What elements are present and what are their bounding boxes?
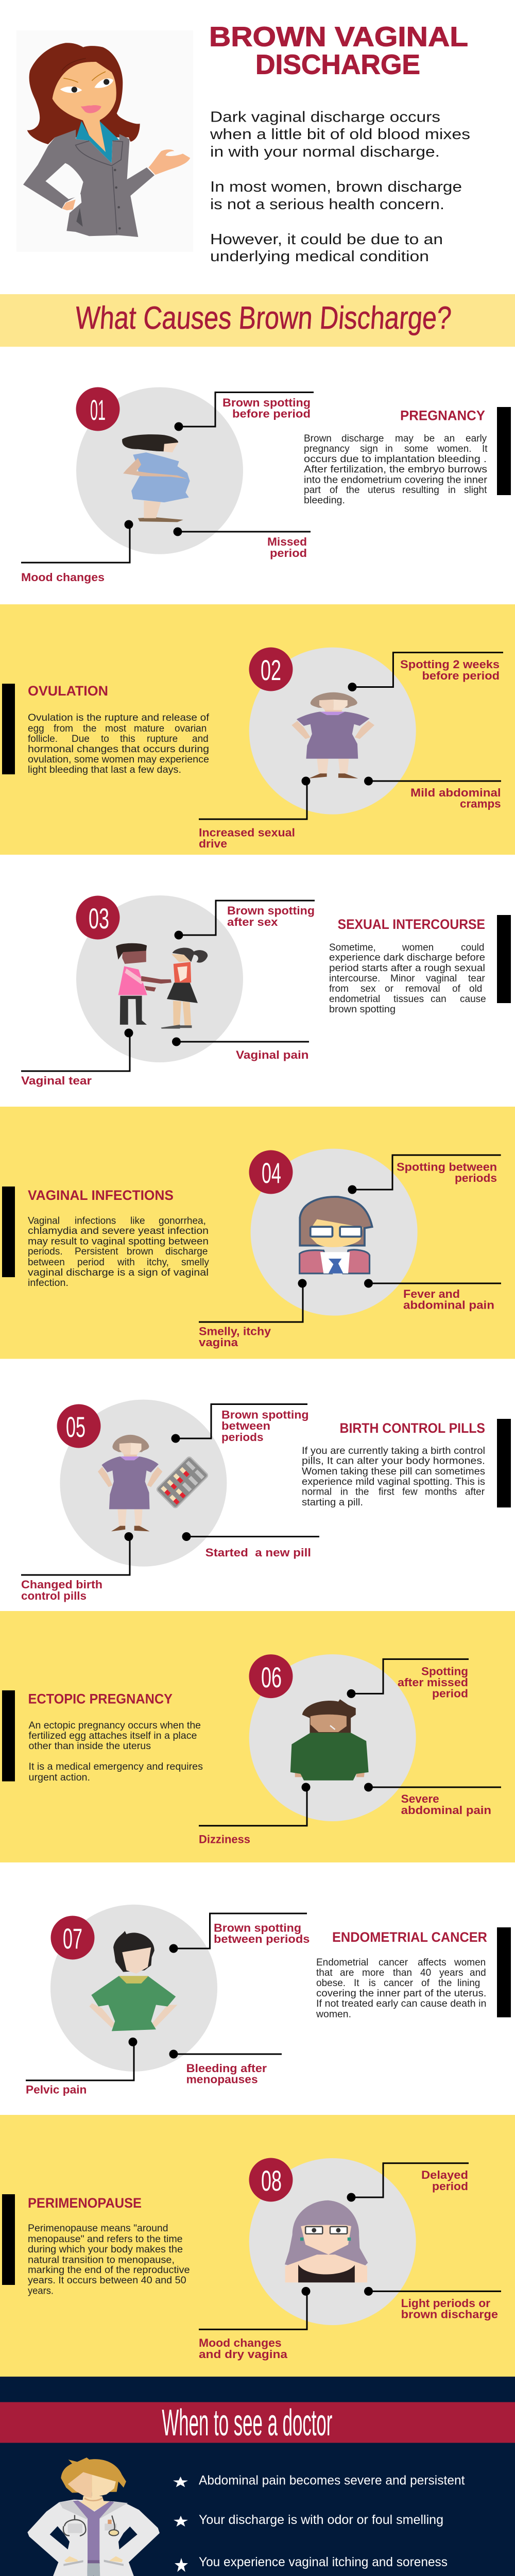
- callout: spotting 2 weeks before period: [348, 652, 503, 691]
- callout: brown spotting between periods: periods: [221, 1431, 264, 1444]
- body text: sexual intercourse: vaginal: [426, 973, 457, 984]
- body text: pregnancy: early: [466, 433, 487, 444]
- callout: fever and abdominal pain: Fever and: [403, 1287, 460, 1300]
- body text: ovulation: hormonal changes that occurs during: [28, 744, 209, 755]
- callout: bleeding after menopauses: Bleeding after: [186, 2062, 267, 2075]
- body text: pregnancy: women.: [437, 444, 472, 454]
- number badge 06: 06: [261, 1661, 282, 1693]
- body text: ovulation: ovarian: [175, 723, 207, 734]
- accent bar: [497, 915, 511, 1003]
- illustration circle with couple: [76, 895, 243, 1062]
- number badge 02: [249, 647, 293, 691]
- accent bar: [497, 1927, 511, 2018]
- body text: pregnancy: slight: [464, 485, 487, 496]
- heading: when to see a doctor: When to see a doctor: [162, 2402, 332, 2444]
- number badge 08: [249, 2158, 293, 2202]
- accent bar: [2, 1690, 15, 1782]
- body text: vaginal infections: smelly: [181, 1257, 209, 1268]
- callout: fever and abdominal pain: abdominal pain: [403, 1299, 494, 1312]
- callout: spotting after missed period: [347, 1659, 469, 1700]
- panel: 07 endometrial cancer: [26, 1905, 511, 2096]
- callout: fever and abdominal pain: [364, 1279, 501, 1312]
- body text: vaginal infections: brown: [127, 1246, 153, 1257]
- callout: pelvic pain: [26, 2038, 137, 2096]
- body text: pregnancy: Brown: [304, 433, 332, 444]
- callout: bleeding after menopauses: menopauses: [186, 2073, 258, 2086]
- body text: perimenopause: natural transition to menopause,: [28, 2255, 175, 2266]
- callout: increased sexual drive: Increased sexual: [199, 826, 295, 839]
- body text: sexual intercourse: old: [469, 984, 482, 994]
- accent bar: [2, 1187, 15, 1277]
- callout: pelvic pain: Pelvic pain: [26, 2083, 87, 2096]
- intro text: underlying medical condition: [210, 248, 429, 265]
- number badge 01: 01: [90, 394, 106, 426]
- body text: ectopic pregnancy: An ectopic pregnancy occurs when the: [29, 1720, 201, 1731]
- body text: sexual intercourse: of: [452, 984, 461, 994]
- body text: ovulation: mature: [134, 723, 164, 734]
- callout: missed period: [173, 528, 311, 560]
- body text: pregnancy: in: [385, 444, 393, 454]
- callout: brown spotting before period: before period: [232, 408, 311, 420]
- body text: endometrial cancer: more: [362, 1968, 384, 1978]
- body text: vaginal infections: infection.: [28, 1278, 68, 1289]
- callout: spotting after missed period: period: [432, 1687, 468, 1700]
- panel: 05 birth control pills: [21, 1400, 511, 1602]
- panel: 08 perimenopause: [0, 2115, 515, 2377]
- body text: birth control pills: normal: [302, 1487, 332, 1497]
- body text: vaginal infections: [28, 1215, 209, 1289]
- intro text: is not a serious health concern.: [210, 196, 444, 213]
- body text: sexual intercourse: from: [329, 984, 349, 994]
- accent bar: [2, 2194, 15, 2285]
- body text: pregnancy: occurs due to implantation bleeding .: [304, 454, 487, 465]
- body text: perimenopause: years.: [28, 2286, 54, 2297]
- illustration circle with purple haired woman: [249, 2158, 416, 2325]
- body text: ovulation: Ovulation is the rupture and release of: [28, 713, 210, 723]
- list item: abdominal pain: Abdominal pain becomes severe and persistent: [199, 2473, 465, 2487]
- body text: pregnancy: discharge: [341, 433, 384, 444]
- callout: severe abdominal pain: [364, 1783, 501, 1817]
- body text: vaginal infections: between: [28, 1257, 65, 1268]
- callout: severe abdominal pain: Severe: [401, 1792, 439, 1805]
- body text: endometrial cancer: It: [354, 1978, 359, 1989]
- illustration circle with pregnant woman: [76, 387, 243, 554]
- callout: mood changes: [21, 520, 133, 584]
- body text: birth control pills: starting a pill.: [302, 1497, 363, 1508]
- callout: brown spotting before period: [174, 393, 314, 431]
- callout: smelly itchy vagina: vagina: [199, 1336, 238, 1349]
- number badge 03: [76, 895, 119, 940]
- intro text: Dark vaginal discharge occurs: [210, 109, 440, 126]
- callout: brown spotting after sex: Brown spotting: [227, 904, 315, 917]
- body text: ovulation: to: [101, 734, 109, 744]
- accent bar: [497, 1419, 511, 1507]
- intro text: when a little bit of old blood mixes: [210, 126, 470, 143]
- number badge 05: [57, 1404, 101, 1448]
- body text: endometrial cancer: women: [454, 1957, 486, 1968]
- body text: pregnancy: be: [424, 433, 435, 444]
- number badge 04: [249, 1150, 293, 1194]
- panel: 06 ectopic pregnancy: [0, 1611, 515, 1862]
- callout: increased sexual drive: [199, 777, 310, 850]
- body text: ovulation: most: [105, 723, 127, 734]
- callout: bleeding after menopauses: [169, 2049, 282, 2086]
- body text: vaginal infections: like: [130, 1215, 145, 1226]
- body text: endometrial cancer: years: [439, 1968, 463, 1978]
- panel: 02 ovulation: [0, 604, 515, 855]
- callout: brown spotting between periods: Brown spotting: [214, 1922, 301, 1935]
- body text: sexual intercourse: experience dark discharge before: [329, 952, 485, 963]
- body text: vaginal infections: may result to vaginal spotting between: [28, 1236, 209, 1247]
- body text: pregnancy: the: [346, 485, 359, 496]
- callout: started a new pill: [182, 1532, 319, 1559]
- callout: dizziness: [199, 1783, 310, 1846]
- callout: mood changes and dry vagina: Mood changes: [199, 2336, 282, 2349]
- body text: ovulation: Due: [72, 734, 90, 744]
- callout: brown spotting between periods: [169, 1913, 310, 1953]
- body text: sexual intercourse: intercourse.: [329, 973, 380, 984]
- illustration: woman presenting: [16, 30, 193, 252]
- body text: endometrial cancer: are: [340, 1968, 354, 1978]
- body text: birth control pills: in: [340, 1487, 348, 1497]
- callout: smelly itchy vagina: Smelly, itchy: [199, 1325, 271, 1338]
- body text: ectopic pregnancy: It is a medical emergency and requires: [29, 1761, 203, 1772]
- callout: mood changes and dry vagina: and dry vagina: [199, 2348, 288, 2361]
- body text: vaginal infections: chlamydia and severe yeast infection: [28, 1226, 209, 1236]
- body text: sexual intercourse: tear: [468, 973, 485, 984]
- body text: endometrial cancer: than: [393, 1968, 412, 1978]
- body text: endometrial cancer: the: [438, 1978, 452, 1989]
- body text: vaginal infections: discharge: [165, 1246, 208, 1257]
- heading: endometrial cancer: ENDOMETRIAL CANCER: [332, 1929, 487, 1945]
- body text: endometrial cancer: and: [470, 1968, 486, 1978]
- body text: birth control pills: Women taking these pill can sometimes: [302, 1466, 485, 1477]
- body text: sexual intercourse: [329, 942, 486, 1015]
- body text: perimenopause: [28, 2223, 190, 2297]
- heading banner: what causes brown discharge: [0, 294, 515, 347]
- body text: ovulation: the: [83, 723, 96, 734]
- callout: mild abdominal cramps: Mild abdominal: [410, 786, 501, 799]
- callout: started a new pill: Started a new pill: [205, 1546, 311, 1559]
- heading: vaginal infections: VAGINAL INFECTIONS: [28, 1188, 174, 1203]
- callout: brown spotting after sex: after sex: [227, 916, 278, 928]
- heading: pregnancy: PREGNANCY: [400, 408, 485, 423]
- panel: 04 vaginal infections: [0, 1107, 515, 1359]
- body text: endometrial cancer: women.: [316, 2009, 351, 2020]
- body text: endometrial cancer: [316, 1957, 486, 2020]
- body text: ectopic pregnancy: other than inside the uterus: [29, 1741, 151, 1752]
- number badge 08: 08: [261, 2164, 282, 2197]
- body text: vaginal infections: itchy,: [147, 1257, 169, 1268]
- callout: spotting 2 weeks before period: before period: [422, 669, 500, 682]
- callout: spotting after missed period: Spotting: [421, 1665, 468, 1678]
- body text: sexual intercourse: tissues: [393, 994, 424, 1005]
- title: DISCHARGE: [255, 49, 420, 80]
- body text: ovulation: this: [120, 734, 135, 744]
- heading: when to see a doctor: [0, 2402, 515, 2444]
- body text: perimenopause: marking the end of the reproductive: [28, 2265, 190, 2276]
- panel: hero introduction: [16, 22, 470, 265]
- callout: brown spotting after sex: [174, 901, 315, 940]
- body text: pregnancy: sign: [360, 444, 378, 454]
- heading: sexual intercourse: SEXUAL INTERCOURSE: [338, 917, 485, 932]
- panel: when to see a doctor: [0, 2377, 515, 2576]
- body text: vaginal infections: period: [77, 1257, 105, 1268]
- illustration circle with woman and pill blister: [60, 1400, 227, 1567]
- intro text: However, it could be due to an: [210, 231, 443, 248]
- body text: pregnancy: part: [304, 485, 321, 496]
- body text: ovulation: follicle.: [28, 734, 58, 744]
- body text: birth control pills: first: [379, 1487, 394, 1497]
- body text: ectopic pregnancy: urgent action.: [29, 1772, 90, 1783]
- callout: light periods or brown discharge: [364, 2287, 501, 2321]
- body text: pregnancy: [304, 433, 488, 506]
- body text: ovulation: rupture: [147, 734, 178, 744]
- callout: delayed period: Delayed: [421, 2168, 468, 2181]
- title: [209, 22, 468, 80]
- number badge 07: 07: [63, 1922, 82, 1955]
- body text: birth control pills: months: [425, 1487, 457, 1497]
- body text: vaginal infections: Vaginal: [28, 1215, 60, 1226]
- callout: vaginal pain: [172, 1038, 309, 1061]
- body text: perimenopause: years. It occurs between 40 and 50: [28, 2275, 186, 2286]
- body text: sexual intercourse: cause: [460, 994, 486, 1005]
- body text: sexual intercourse: period starts after a rough sexual: [329, 963, 485, 974]
- body text: endometrial cancer: cancer: [384, 1978, 414, 1989]
- body text: ovulation: ovulation, some women may experience: [28, 754, 209, 765]
- body text: pregnancy: into the endometrium covering the inner: [304, 475, 488, 485]
- body text: vaginal infections: periods.: [28, 1246, 63, 1257]
- callout: changed birth control pills: [21, 1532, 133, 1602]
- heading: birth control pills: BIRTH CONTROL PILLS: [340, 1420, 485, 1436]
- callout: spotting between periods: [348, 1155, 501, 1194]
- number badge 05: 05: [66, 1411, 85, 1443]
- callout: vaginal tear: Vaginal tear: [21, 1074, 92, 1087]
- number badge 06: [249, 1654, 293, 1698]
- body text: endometrial cancer: obese.: [316, 1978, 346, 1989]
- body text: pregnancy: some: [404, 444, 428, 454]
- body text: pregnancy: resulting: [402, 485, 439, 496]
- body text: vaginal infections: infections: [75, 1215, 116, 1226]
- body text: pregnancy: of: [330, 485, 338, 496]
- callout: mild abdominal cramps: [364, 777, 501, 810]
- body text: endometrial cancer: cancer: [379, 1957, 408, 1968]
- body text: pregnancy: pregnancy: [304, 444, 350, 454]
- callout: spotting 2 weeks before period: Spotting 2 weeks: [400, 658, 500, 671]
- body text: birth control pills: experience mild vaginal spotting. This is: [302, 1477, 485, 1487]
- body text: ectopic pregnancy: fertilized egg attaches itself in a place: [29, 1731, 197, 1741]
- body text: birth control pills: If you are currently taking a birth control: [302, 1446, 485, 1456]
- title: BROWN VAGINAL: [209, 22, 468, 53]
- intro text: In most women, brown discharge: [210, 179, 462, 195]
- body text: endometrial cancer: covering the inner part of the uterus.: [316, 1988, 486, 1999]
- body text: ovulation: light bleeding that last a few days.: [28, 765, 181, 775]
- body text: pregnancy: It: [482, 444, 488, 454]
- callout: spotting after missed period: after missed: [398, 1676, 468, 1689]
- callout: severe abdominal pain: abdominal pain: [401, 1804, 491, 1817]
- callout: brown spotting before period: Brown spotting: [222, 396, 311, 409]
- body text: vaginal infections: with: [117, 1257, 135, 1268]
- body text: ovulation: [28, 713, 210, 775]
- body text: sexual intercourse: Minor: [390, 973, 415, 984]
- number badge 03: 03: [89, 902, 109, 935]
- body text: ovulation: egg: [28, 723, 44, 734]
- list item: itching and soreness: You experience vaginal itching and soreness: [199, 2555, 448, 2569]
- heading: ovulation: OVULATION: [28, 683, 108, 699]
- callout: delayed period: period: [432, 2180, 468, 2193]
- callout: dizziness: Dizziness: [199, 1833, 250, 1846]
- intro text: in with your normal discharge.: [210, 144, 440, 160]
- number badge 07: [50, 1916, 95, 1960]
- body text: endometrial cancer: If not treated early can cause death in: [316, 1998, 486, 2009]
- body text: birth control pills: pills, It can alter your body hormones.: [302, 1456, 485, 1467]
- number badge 04: 04: [262, 1157, 281, 1189]
- callout: brown spotting between periods: between: [221, 1419, 270, 1432]
- illustration circle with woman in glasses: [251, 1149, 418, 1316]
- callout: vaginal tear: [21, 1028, 133, 1087]
- body text: pregnancy: in: [448, 485, 456, 496]
- body text: perimenopause: menopause" and refers to the time: [28, 2234, 183, 2245]
- body text: endometrial cancer: that: [316, 1968, 333, 1978]
- heading: perimenopause: PERIMENOPAUSE: [28, 2195, 142, 2211]
- number badge 02: 02: [261, 654, 281, 686]
- illustration circle with sick woman in green sweater: [249, 1654, 416, 1821]
- body text: birth control pills: the: [355, 1487, 369, 1497]
- body text: pregnancy: an: [444, 433, 455, 444]
- body text: sexual intercourse: or: [385, 984, 394, 994]
- body text: sexual intercourse: can: [431, 994, 447, 1005]
- body text: vaginal infections: vaginal discharge is a sign of vaginal: [28, 1267, 209, 1278]
- callout: light periods or brown discharge: brown discharge: [401, 2308, 498, 2321]
- callout: delayed period: [347, 2163, 469, 2202]
- callout: changed birth control pills: Changed birth: [21, 1578, 102, 1591]
- body text: perimenopause: Perimenopause means "around: [28, 2223, 168, 2234]
- body text: sexual intercourse: could: [461, 942, 484, 953]
- body text: endometrial cancer: 40: [420, 1968, 431, 1978]
- body text: vaginal infections: gonorrhea,: [159, 1215, 206, 1226]
- intro text: [210, 109, 470, 265]
- illustration: doctor: [27, 2458, 160, 2576]
- body text: vaginal infections: Persistent: [75, 1246, 118, 1257]
- accent bar: [2, 684, 15, 774]
- body text: endometrial cancer: of: [421, 1978, 430, 1989]
- body text: endometrial cancer: affects: [418, 1957, 447, 1968]
- body text: sexual intercourse: sex: [360, 984, 376, 994]
- body text: pregnancy: uterus: [368, 485, 395, 496]
- body text: sexual intercourse: brown spotting: [329, 1004, 396, 1015]
- body text: birth control pills: few: [402, 1487, 418, 1497]
- accent bar: [497, 407, 511, 495]
- body text: pregnancy: bleeding.: [304, 495, 345, 506]
- callout: missed period: period: [270, 547, 307, 560]
- body text: perimenopause: during which your body makes the: [28, 2244, 183, 2255]
- body text: endometrial cancer: Endometrial: [316, 1957, 368, 1968]
- body text: birth control pills: [302, 1446, 485, 1508]
- callout: increased sexual drive: drive: [199, 837, 227, 850]
- body text: birth control pills: after: [465, 1487, 485, 1497]
- callout: spotting between periods: Spotting between: [397, 1161, 497, 1174]
- body text: ovulation: from: [54, 723, 73, 734]
- body text: ovulation: and: [192, 734, 209, 744]
- callout: mild abdominal cramps: cramps: [460, 798, 501, 810]
- body text: sexual intercourse: women: [402, 942, 434, 953]
- body text: pregnancy: After fertilization, the embryo burrows: [304, 464, 487, 475]
- panel: 03 sexual intercourse: [21, 895, 511, 1087]
- number badge 01: [76, 387, 119, 431]
- body text: sexual intercourse: endometrial: [329, 994, 380, 1005]
- body text: endometrial cancer: lining: [457, 1978, 480, 1989]
- callout: light periods or brown discharge: Light periods or: [401, 2297, 490, 2310]
- panel: 01 pregnancy: [21, 387, 511, 584]
- callout: brown spotting between periods: [171, 1404, 309, 1444]
- illustration circle with woman in purple dress: [249, 648, 416, 815]
- list item: discharge odor: Your discharge is with odor or foul smelling: [199, 2513, 443, 2527]
- heading: ectopic pregnancy: ECTOPIC PREGNANCY: [28, 1691, 173, 1706]
- body text: pregnancy: may: [395, 433, 414, 444]
- callout: mood changes and dry vagina: [199, 2287, 310, 2361]
- body text: sexual intercourse: Sometime,: [329, 942, 376, 953]
- callout: vaginal pain: Vaginal pain: [236, 1048, 309, 1061]
- body text: ectopic pregnancy: [29, 1720, 203, 1783]
- body text: endometrial cancer: is: [369, 1978, 376, 1989]
- body text: sexual intercourse: removal: [405, 984, 440, 994]
- illustration circle with woman in green shirt: [50, 1905, 217, 2072]
- callout: missed period: Missed: [267, 535, 307, 548]
- callout: brown spotting between periods: Brown spotting: [221, 1409, 309, 1421]
- callout: brown spotting between periods: between periods: [214, 1933, 310, 1945]
- callout: changed birth control pills: control pills: [21, 1589, 87, 1602]
- callout: mood changes: Mood changes: [21, 571, 105, 584]
- callout: smelly itchy vagina: [199, 1279, 307, 1349]
- callout: spotting between periods: periods: [455, 1172, 497, 1184]
